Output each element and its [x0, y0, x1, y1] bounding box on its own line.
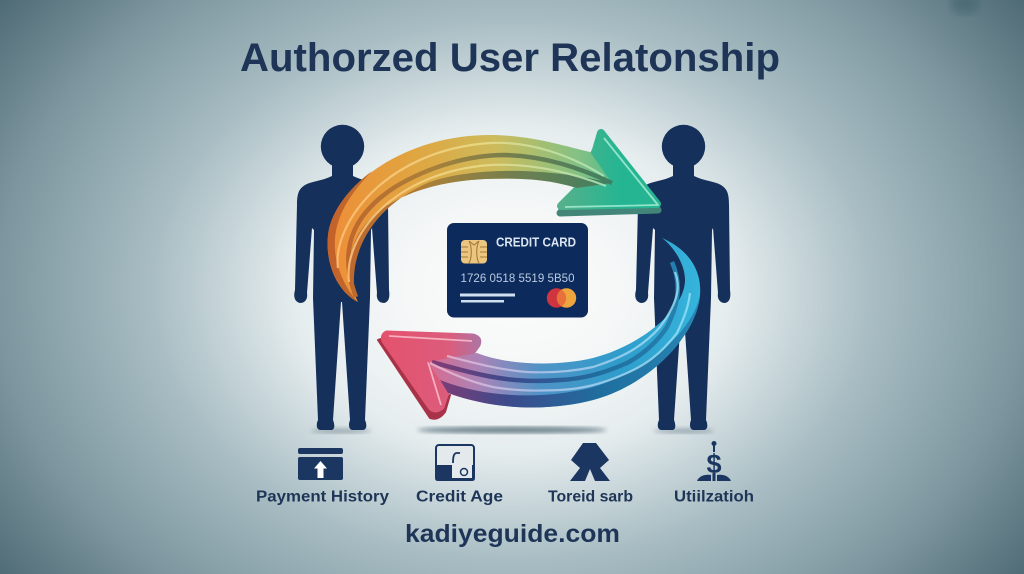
icon: utilization dollar	[697, 441, 731, 481]
signature lines	[460, 294, 515, 302]
arrow: bottom arrow from right person to left person	[378, 238, 700, 419]
title: Authorzed User Relatonship	[240, 36, 780, 80]
icon: card network logo	[547, 288, 576, 308]
icon: EMV chip	[461, 240, 487, 264]
website: kadiyeguide.com	[405, 520, 620, 548]
icon: credit age	[435, 445, 475, 481]
label: third factor: Toreid sarb	[548, 488, 633, 506]
icon: utilization dollar: $	[706, 449, 722, 479]
card number: 1726 0518 5519 5B50	[460, 273, 574, 285]
corner smudge	[951, 0, 979, 14]
person: right silhouette	[635, 125, 730, 430]
credit card	[447, 223, 588, 318]
ground shadow	[311, 426, 714, 434]
arrow: top arrow from left person to right person	[328, 133, 658, 302]
icon: third factor	[570, 443, 610, 481]
label: payment history: Payment History	[256, 488, 389, 506]
person: left silhouette	[294, 125, 389, 430]
label: credit age: Credit Age	[416, 488, 503, 506]
label: utilization: Utiilzatioh	[674, 488, 754, 506]
icon: payment history	[298, 448, 343, 480]
card label: CREDIT CARD	[496, 236, 576, 250]
